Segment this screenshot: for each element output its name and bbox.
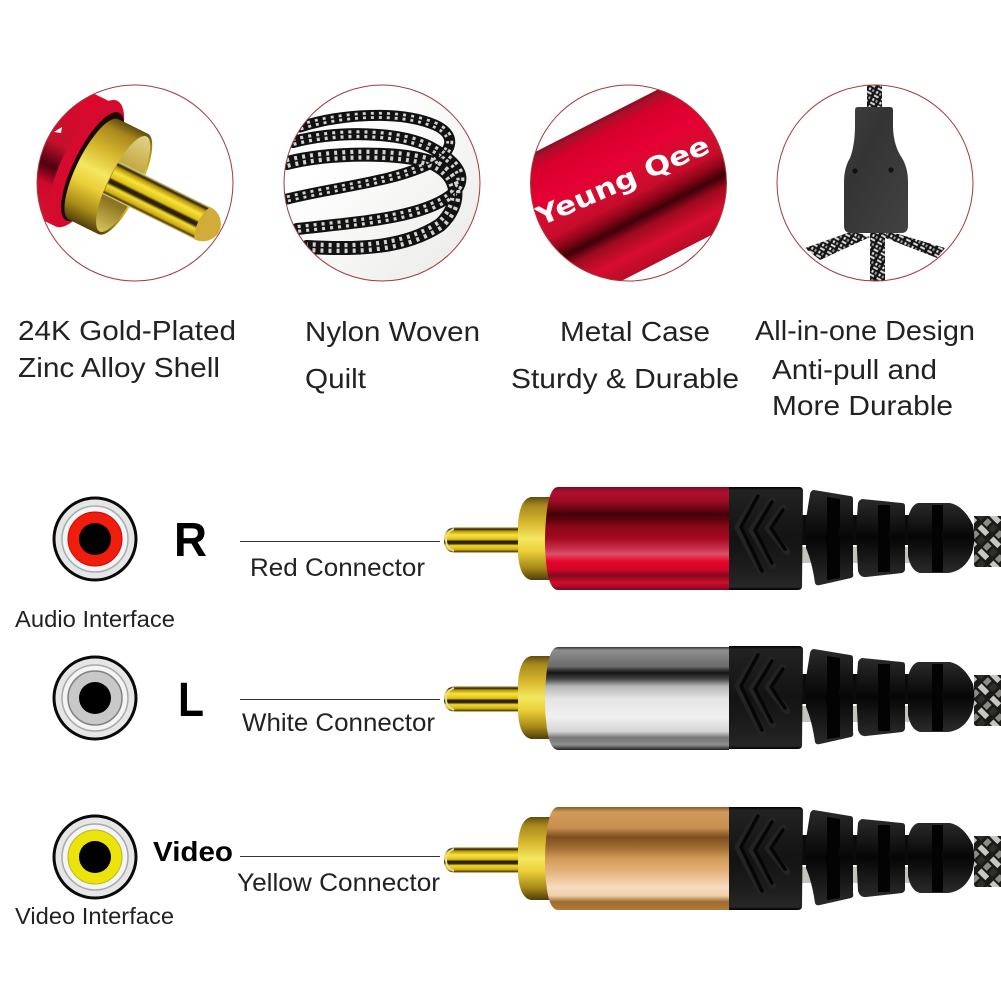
icon: white audio socket	[54, 657, 136, 739]
icon: yellow video socket	[54, 816, 136, 898]
leader line: white	[240, 699, 440, 700]
panel: all-in-one splitter photo	[777, 84, 973, 282]
panel: nylon woven cable photo	[284, 85, 480, 281]
feature text: all-in-one design	[755, 315, 975, 421]
brand lettering: Yeung Qee	[531, 131, 714, 233]
feature text: gold plated	[18, 315, 236, 383]
label: video: Video	[153, 836, 233, 867]
panel: gold plated shell photo	[36, 84, 234, 282]
red connector body	[38, 94, 109, 226]
moulded splitter body	[844, 107, 908, 233]
label: yellow connector: Yellow Connector	[237, 869, 440, 897]
connector: yellow	[444, 807, 1001, 910]
label: red connector: Red Connector	[250, 554, 425, 582]
feature text: gold plated: 24K Gold-Plated	[18, 315, 236, 346]
connector: red	[444, 487, 1001, 590]
label: L: L	[178, 674, 204, 727]
feature text: metal case: Metal Case	[560, 316, 710, 347]
label: R: R	[174, 514, 207, 567]
feature text: nylon woven: Quilt	[305, 363, 366, 394]
connector: white	[444, 646, 1001, 750]
feature text: nylon woven: Nylon Woven	[305, 316, 480, 347]
feature text: all-in-one design: All-in-one Design	[755, 315, 975, 346]
feature text: metal case: Sturdy & Durable	[511, 363, 739, 394]
label: white connector: White Connector	[242, 709, 435, 737]
feature text: all-in-one design: More Durable	[772, 390, 953, 421]
red flange	[52, 100, 124, 228]
label: video interface: Video Interface	[15, 903, 174, 929]
icon: red audio socket	[54, 498, 136, 580]
leader line: red	[240, 541, 440, 542]
panel: red metal case photo	[530, 84, 727, 282]
label: audio interface: Audio Interface	[15, 606, 175, 632]
feature text: all-in-one design: Anti-pull and	[772, 354, 937, 385]
leader line: yellow	[240, 856, 440, 857]
feature text: gold plated: Zinc Alloy Shell	[18, 352, 220, 383]
gold pin	[102, 162, 221, 242]
gold ring	[64, 118, 152, 235]
feature text: nylon woven	[305, 316, 480, 394]
feature text: metal case	[511, 316, 739, 394]
